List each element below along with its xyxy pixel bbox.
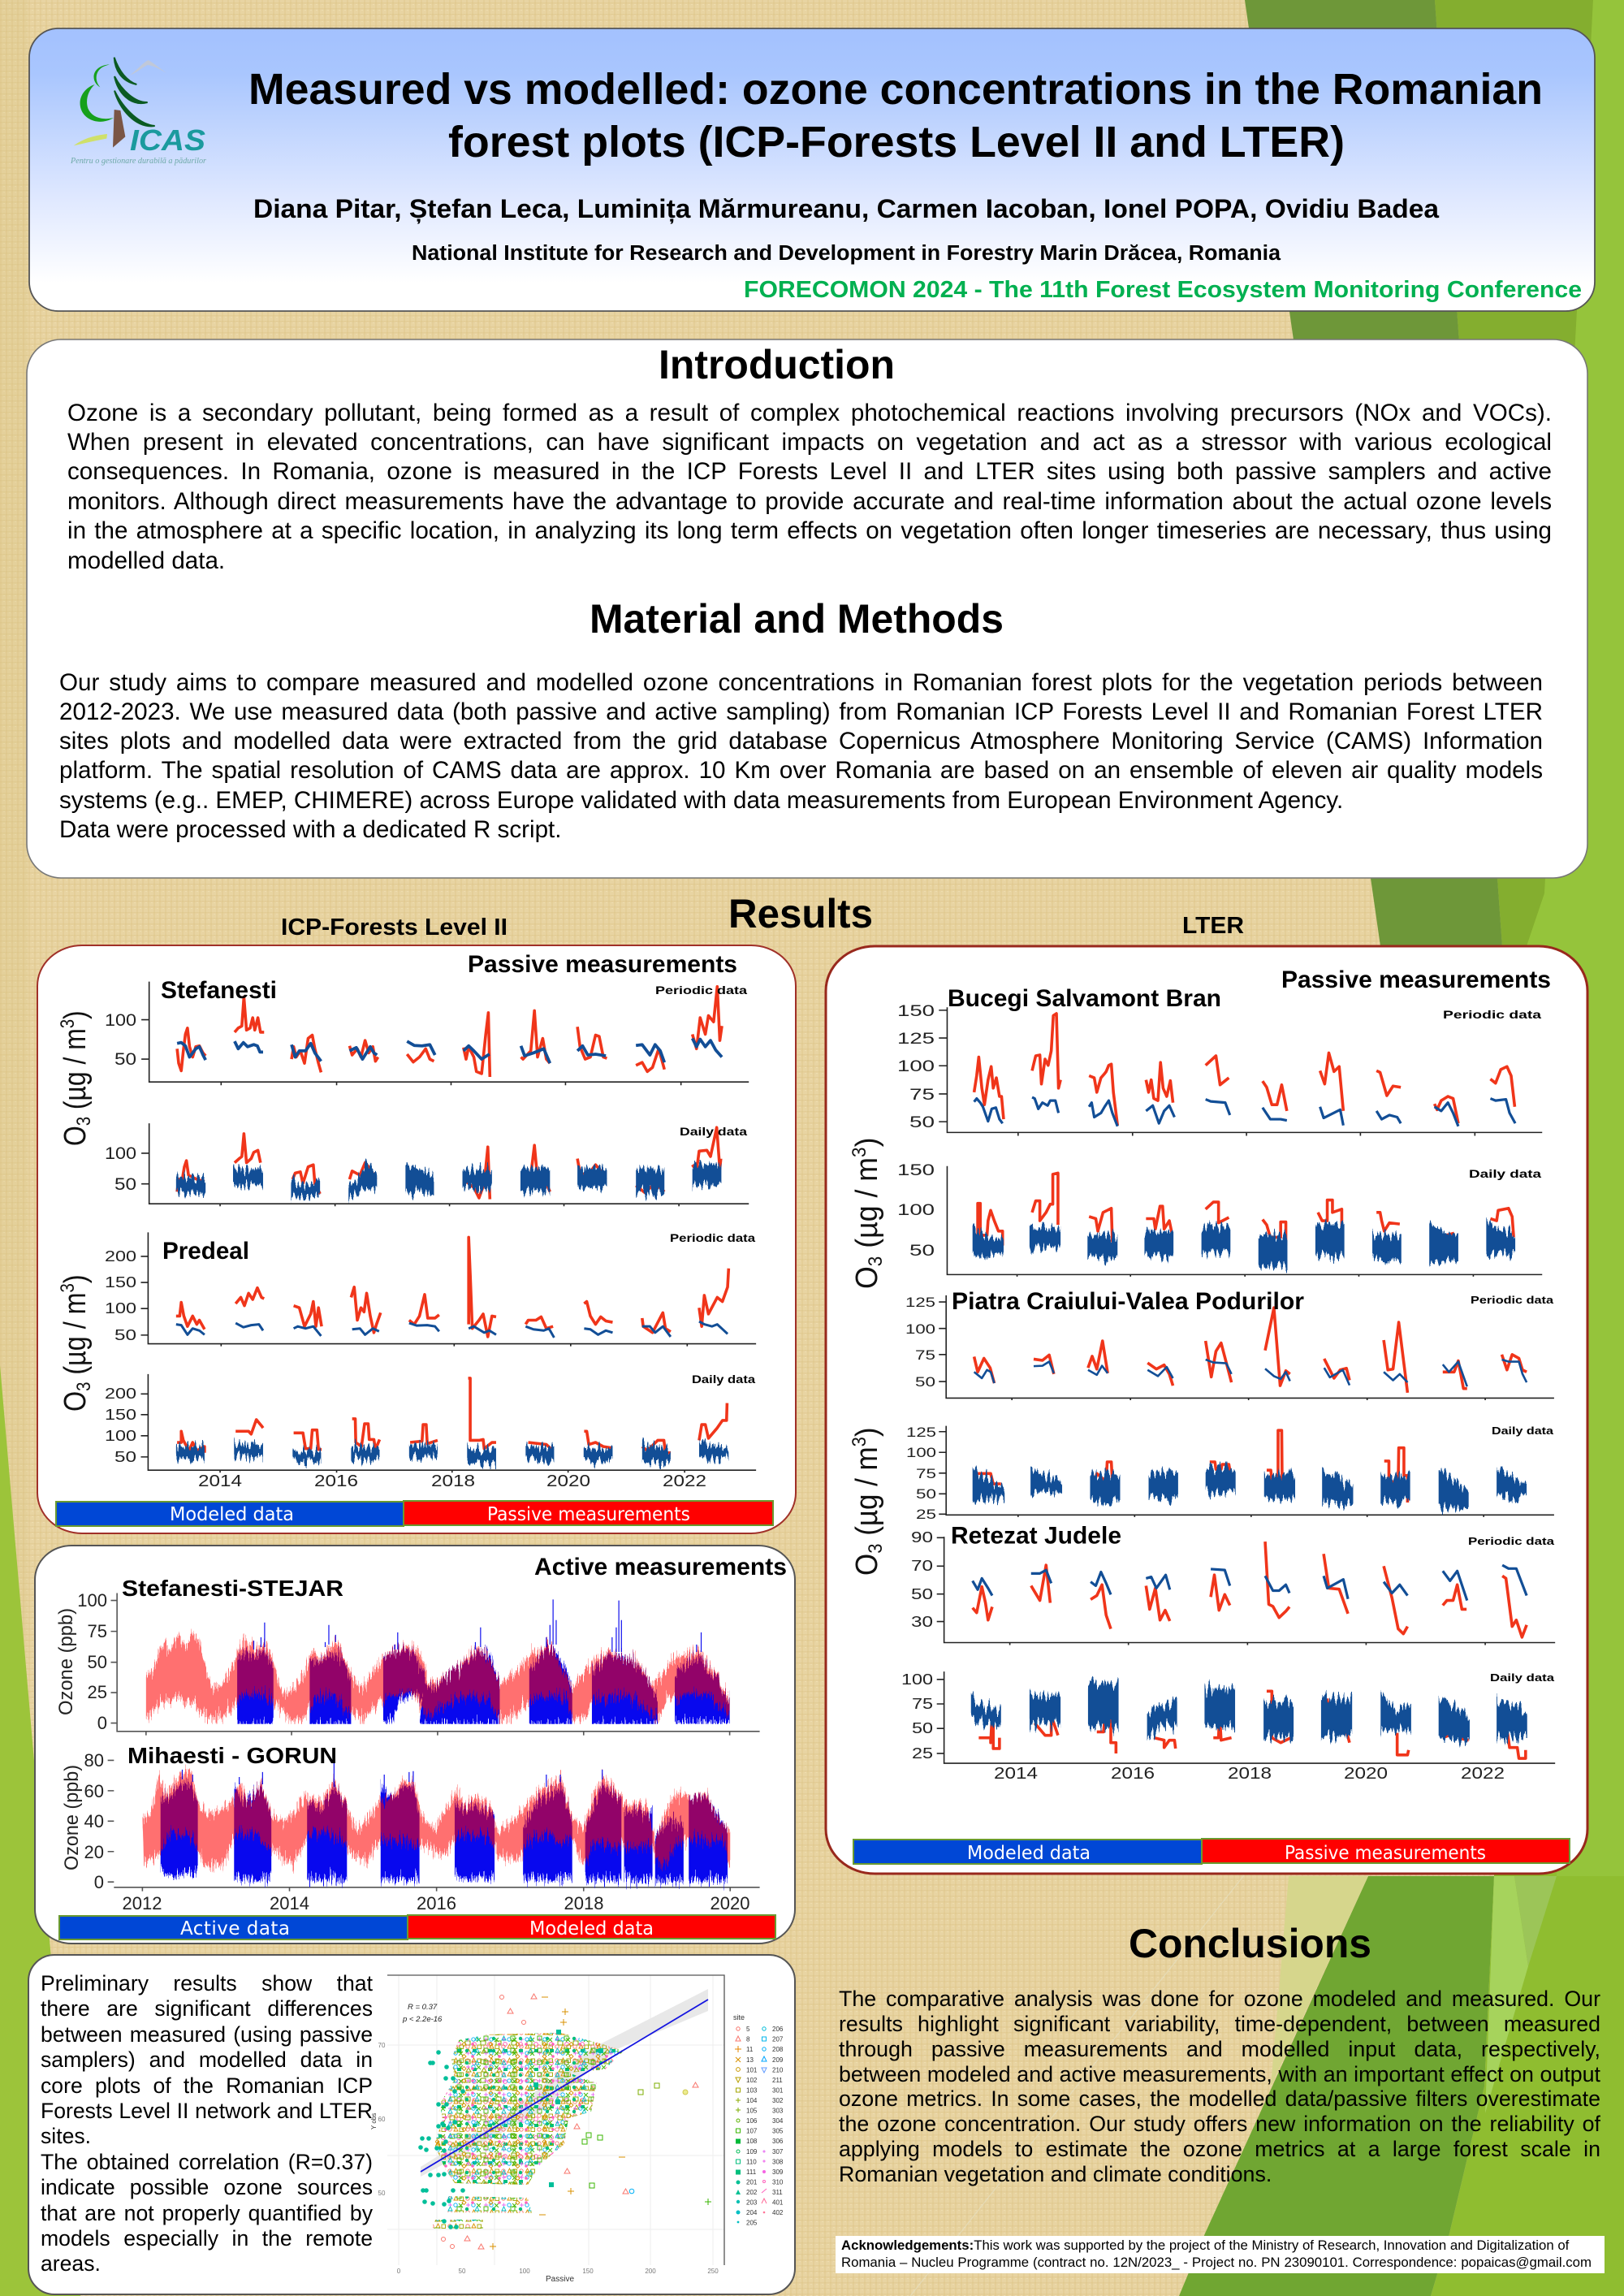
legend: site codes: 310 xyxy=(772,2178,784,2186)
chart: Stefanesti daily data: 50 xyxy=(114,1175,136,1194)
legend: site codes: 205 xyxy=(746,2219,758,2227)
chart: Stefanesti-STEJAR ozone time series: Stefanesti-STEJAR xyxy=(122,1576,343,1601)
chart: Predeal daily data: 50 xyxy=(114,1449,136,1465)
title: forest plots (ICP-Forests Level II and LTER) xyxy=(448,118,1345,166)
text block: introduction: in the atmosphere at a specific location, in analyzing its long term effects on vegetation often longer timeseries are necessary, thus using xyxy=(67,517,1552,544)
authors: Diana Pitar, Ștefan Leca, Luminița Mărmureanu, Carmen Iacoban, Ionel POPA, Ovidiu Badea xyxy=(253,194,1439,223)
chart: scatter plot of modelled vs passive ozone: 250 xyxy=(707,2268,719,2275)
legend: site codes: 308 xyxy=(772,2159,784,2165)
legend: site codes: 106 xyxy=(746,2117,758,2125)
legend: site codes: 211 xyxy=(772,2077,783,2084)
chart: Piatra Craiului daily data: 25 xyxy=(916,1507,936,1522)
chart: Predeal daily data: 2022 xyxy=(663,1472,706,1490)
text block: preliminary results xyxy=(41,1971,382,2284)
axis label: O3 Stefanesti: 3 xyxy=(72,1117,94,1126)
chart: Stefanesti periodic data: 50 xyxy=(114,1050,136,1069)
chart: Mihaesti-GORUN ozone time series: 20 xyxy=(84,1842,104,1862)
conference name: FORECOMON 2024 - The 11th Forest Ecosystem Monitoring Conference xyxy=(744,277,1582,303)
axis label: O3 Predeal: 3 xyxy=(56,1283,78,1292)
legend: site codes: 102 xyxy=(746,2077,758,2084)
legend: site codes: site xyxy=(733,2013,745,2021)
legend bar: modeled vs passive xyxy=(56,1501,773,1526)
chart: scatter plot of modelled vs passive ozone: 200 xyxy=(645,2268,656,2275)
chart: Bucegi daily data: 150 xyxy=(897,1162,935,1179)
icon: ICAS logo xyxy=(70,58,207,166)
axis label: O3 Predeal: O xyxy=(58,1391,93,1412)
chart: Bucegi periodic data: 100 xyxy=(897,1058,935,1075)
chart: Retezat Judele daily data: 50 xyxy=(912,1720,933,1736)
legend: site codes: 8 xyxy=(746,2035,750,2043)
axis label: O3 Bucegi: 3 xyxy=(864,1256,886,1266)
legend: site codes: 301 xyxy=(772,2087,784,2094)
chart: Stefanesti periodic data: Periodic data xyxy=(655,984,747,997)
chart: Retezat Judele daily data: Daily data xyxy=(1490,1671,1555,1684)
text block: conclusions: Romanian vegetation and climate conditions. xyxy=(839,2162,1272,2186)
panel heading: Passive measurements: Passive measurements xyxy=(1281,966,1551,993)
text block: preliminary results: areas. xyxy=(41,2251,101,2276)
legend: site codes: 207 xyxy=(772,2035,784,2043)
legend: site codes: 111 xyxy=(746,2168,757,2176)
chart: Piatra Craiului periodic data: 50 xyxy=(915,1374,935,1390)
chart: Piatra Craiului periodic data: Piatra Craiului-Valea Podurilor xyxy=(952,1288,1304,1315)
chart: Predeal daily data: 2018 xyxy=(431,1472,475,1490)
legend bar: active vs modeled: Modeled data xyxy=(529,1918,654,1939)
legend: site codes: 105 xyxy=(746,2107,758,2115)
axis label: O3 Predeal: 3 xyxy=(72,1382,94,1391)
chart: Bucegi periodic data: 125 xyxy=(897,1031,935,1048)
panel heading: Passive measurements: Passive measurements xyxy=(468,951,737,978)
chart: Predeal periodic data: 200 xyxy=(105,1248,136,1265)
text block: introduction xyxy=(67,398,1578,582)
chart: Mihaesti-GORUN ozone time series: Mihaesti - GORUN xyxy=(127,1743,337,1768)
chart: scatter plot of modelled vs passive ozone: 100 xyxy=(519,2268,530,2275)
chart: scatter plot of modelled vs passive ozone: R = 0.37 xyxy=(408,2003,438,2012)
chart: Retezat Judele periodic data: 50 xyxy=(911,1586,933,1602)
chart: Stefanesti-STEJAR ozone time series: 25 xyxy=(88,1682,107,1702)
legend: site codes: 302 xyxy=(772,2097,784,2104)
axis label: O3 Bucegi: (µg / m xyxy=(849,1157,883,1256)
chart: Stefanesti daily data: 100 xyxy=(105,1144,136,1163)
chart: Mihaesti-GORUN ozone time series: 60 xyxy=(84,1781,104,1801)
chart: Retezat Judele daily data: 100 xyxy=(901,1671,933,1688)
legend: site codes: 109 xyxy=(746,2148,758,2155)
chart: scatter plot of modelled vs passive ozone: 60 xyxy=(378,2116,386,2123)
axis label: O3 Stefanesti: 3 xyxy=(56,1019,78,1028)
acknowledgements box: Acknowledgements:This work was supported by the project of the Ministry of Research, Innovation and Digitalization of xyxy=(841,2238,1569,2253)
chart: Piatra Craiului daily data xyxy=(906,1425,1554,1522)
text block: conclusions: applying models to estimate the ozone metrics at a large forest scale in xyxy=(839,2137,1600,2161)
heading: ICP-Forests Level II: ICP-Forests Level II xyxy=(281,915,508,940)
axis label: O3 Piatra and Retezat: 3 xyxy=(864,1544,886,1554)
chart: Predeal periodic data: 50 xyxy=(114,1327,136,1343)
chart: Piatra Craiului daily data: 100 xyxy=(906,1445,936,1460)
chart: Retezat Judele daily data: 2014 xyxy=(994,1765,1038,1783)
chart: scatter plot of modelled vs passive ozone: Passive xyxy=(546,2275,574,2284)
axis label: O3 Stefanesti: (µg / m xyxy=(58,1028,93,1117)
title xyxy=(248,65,1543,166)
chart: Mihaesti-GORUN ozone time series: 2018 xyxy=(564,1893,603,1913)
legend: site codes: 304 xyxy=(772,2117,784,2125)
legend bar: active vs modeled xyxy=(59,1915,775,1939)
legend: site codes: 401 xyxy=(772,2199,784,2206)
chart: Retezat Judele daily data: 2022 xyxy=(1461,1765,1505,1783)
legend: site codes: 5 xyxy=(746,2026,750,2033)
panel: LTER passive measurements xyxy=(826,946,1587,1874)
text block: methods: Data were processed with a dedicated R script. xyxy=(59,816,561,843)
chart: Stefanesti daily data: Daily data xyxy=(680,1125,747,1138)
text block: methods: Our study aims to compare measured and modelled ozone concentrations in Romanian forest plots for the vegetation periods between xyxy=(59,669,1543,695)
chart: Mihaesti-GORUN ozone time series: 2012 xyxy=(123,1893,162,1913)
chart: Piatra Craiului daily data: 75 xyxy=(916,1466,936,1481)
text block: introduction: modelled data. xyxy=(67,547,225,574)
chart: Retezat Judele daily data: 75 xyxy=(912,1696,933,1712)
chart: Bucegi periodic data: 150 xyxy=(897,1003,935,1020)
chart: Stefanesti periodic data xyxy=(105,977,749,1085)
legend: site codes: 209 xyxy=(772,2056,784,2064)
chart: scatter plot of modelled vs passive ozone: 70 xyxy=(378,2042,386,2049)
panel: active measurements xyxy=(35,1546,795,1944)
chart: Retezat Judele periodic data: Periodic data xyxy=(1468,1535,1555,1547)
text block: methods: sites plots and modelled data were extracted from the grid database Copernicus Atmosphere Monitoring Service (CAMS) Information xyxy=(59,728,1543,755)
chart: Bucegi daily data: 50 xyxy=(909,1243,935,1260)
chart: Mihaesti-GORUN ozone time series: 2016 xyxy=(417,1893,456,1913)
chart: Bucegi periodic data: 75 xyxy=(909,1087,935,1104)
legend: site codes: 201 xyxy=(746,2178,758,2186)
chart: Retezat Judele periodic data: 90 xyxy=(911,1529,933,1546)
axis label: O3 Piatra and Retezat: (µg / m xyxy=(849,1446,883,1544)
chart: Bucegi daily data xyxy=(897,1162,1542,1277)
chart: Stefanesti-STEJAR ozone time series: Ozone (ppb) xyxy=(55,1608,77,1715)
chart: Predeal daily data xyxy=(105,1373,756,1490)
chart: Stefanesti-STEJAR ozone time series: 75 xyxy=(88,1621,107,1641)
heading: Results: Results xyxy=(728,891,873,936)
legend: site codes: 305 xyxy=(772,2128,784,2134)
chart: Predeal periodic data: 100 xyxy=(105,1300,136,1317)
text block: preliminary results: Forests Level II network and LTER xyxy=(41,2099,373,2123)
chart: Piatra Craiului daily data: Daily data xyxy=(1492,1425,1554,1437)
legend: site codes: 203 xyxy=(746,2199,758,2206)
chart: Predeal periodic data: Predeal xyxy=(162,1238,249,1265)
text block: conclusions: the ozone concentration. Our study offers new information on the reliability of xyxy=(839,2112,1600,2136)
chart: Mihaesti-GORUN ozone time series xyxy=(61,1743,760,1913)
chart: scatter plot of modelled vs passive ozone: p < 2.2e-16 xyxy=(402,2015,443,2024)
chart: Predeal periodic data: Periodic data xyxy=(670,1231,755,1244)
chart: Piatra Craiului periodic data: 100 xyxy=(905,1321,935,1337)
chart: Bucegi daily data: Daily data xyxy=(1469,1167,1541,1180)
chart: scatter plot of modelled vs passive ozone: 50 xyxy=(378,2190,386,2197)
chart: Stefanesti-STEJAR ozone time series: 0 xyxy=(97,1713,107,1733)
legend: site codes: 309 xyxy=(772,2168,784,2176)
chart: Piatra Craiului periodic data: Periodic data xyxy=(1471,1294,1554,1306)
axis label: O3 Bucegi: ) xyxy=(849,1137,883,1147)
axis label: O3 Predeal: (µg / m xyxy=(58,1292,93,1382)
chart: Retezat Judele daily data: 25 xyxy=(912,1745,933,1762)
legend: site codes: 311 xyxy=(772,2189,783,2196)
text block: introduction: Ozone is a secondary pollutant, being formed as a result of complex photochemical reactions involving precursors (NOx and VOCs). xyxy=(67,400,1552,426)
chart: Predeal daily data: 2016 xyxy=(314,1472,358,1490)
text block: conclusions: through passive measurements and modelled input data, respectively, xyxy=(839,2037,1600,2061)
text block: conclusions: results highlight significant variability, time-dependent, between measured xyxy=(839,2012,1600,2036)
heading: Introduction: Introduction xyxy=(659,342,895,387)
chart: Mihaesti-GORUN ozone time series: 0 xyxy=(94,1872,104,1892)
chart: Predeal daily data: 200 xyxy=(105,1386,136,1402)
legend: site codes: 303 xyxy=(772,2107,784,2115)
axis label: O3 Piatra and Retezat: 3 xyxy=(848,1437,870,1446)
affiliation: National Institute for Research and Development in Forestry Marin Drăcea, Romania xyxy=(412,242,1281,265)
chart: Bucegi periodic data: 50 xyxy=(909,1114,935,1131)
text block: preliminary results: there are significant differences xyxy=(41,1996,373,2021)
text block: preliminary results: that are not properly quantified by xyxy=(41,2201,373,2225)
legend bar: modeled vs passive: Passive measurements xyxy=(487,1504,690,1525)
icon: ICAS logo: Pentru o gestionare durabilă a pădurilor xyxy=(70,156,207,166)
chart: Bucegi daily data: 100 xyxy=(897,1202,935,1219)
chart: Predeal daily data: 150 xyxy=(105,1407,136,1423)
chart: Retezat Judele periodic data: 30 xyxy=(911,1614,933,1630)
chart: Mihaesti-GORUN ozone time series: 40 xyxy=(84,1811,104,1831)
chart: Retezat Judele periodic data: Retezat Judele xyxy=(951,1522,1121,1550)
chart: Bucegi periodic data: Bucegi Salvamont Bran xyxy=(948,985,1221,1012)
axis label: O3 Bucegi: O xyxy=(849,1266,883,1289)
text block: methods: 2012-2023. We use measured data (both passive and active sampling) from Romanian ICP Forests Level II and Romanian Forest LTER xyxy=(59,698,1543,725)
panel: header xyxy=(29,28,1595,311)
chart: Piatra Craiului daily data: 50 xyxy=(916,1486,936,1502)
chart: Retezat Judele daily data: 2018 xyxy=(1228,1765,1272,1783)
text block: preliminary results: between measured (using passive xyxy=(41,2022,373,2047)
chart: Stefanesti periodic data: Stefanesti xyxy=(161,977,277,1004)
axis label: O3 Stefanesti: ) xyxy=(58,1010,93,1019)
legend: site codes: 108 xyxy=(746,2138,758,2145)
chart: Mihaesti-GORUN ozone time series: 2014 xyxy=(270,1893,309,1913)
heading: Conclusions: Conclusions xyxy=(1129,1921,1371,1966)
text block: introduction: monitors. Although direct measurements have the advantage to provide accurate and real-time information about the actual ozone levels xyxy=(67,488,1552,515)
axis label: O3 Piatra and Retezat: ) xyxy=(849,1427,883,1437)
text block: preliminary results: The obtained correlation (R=0.37) xyxy=(41,2150,373,2174)
text block: conclusions: ozone metrics. In some cases, the modelled data/passive filters overestimate xyxy=(839,2086,1600,2111)
chart: Predeal daily data: 2014 xyxy=(198,1472,242,1490)
axis label: O3 Piatra and Retezat: O xyxy=(849,1554,883,1576)
legend: site codes: 13 xyxy=(746,2056,754,2064)
text block: methods xyxy=(59,668,1570,851)
panel heading: Active measurements: Active measurements xyxy=(534,1554,787,1580)
legend: site codes: 206 xyxy=(772,2026,784,2033)
legend bar: active vs modeled: Active data xyxy=(180,1918,290,1939)
chart: Stefanesti-STEJAR ozone time series: 100 xyxy=(77,1590,107,1611)
text block: introduction: When present in elevated concentrations, can have significant impacts on vegetation and act as a stressor with various ecological xyxy=(67,429,1552,456)
text block: preliminary results: models especially in the remote xyxy=(41,2226,373,2251)
chart: Predeal periodic data: 150 xyxy=(105,1274,136,1291)
chart: Mihaesti-GORUN ozone time series: 80 xyxy=(84,1750,104,1771)
text block: preliminary results: sites. xyxy=(41,2124,91,2148)
chart: Piatra Craiului periodic data xyxy=(905,1288,1554,1400)
panel: preliminary results and scatter plot xyxy=(28,1955,795,2294)
text block: methods: platform. The spatial resolution of CAMS data are approx. 10 Km over Romania are based on an ensemble of eleven air quality models xyxy=(59,757,1543,784)
legend: site codes: 110 xyxy=(746,2159,757,2165)
chart: Retezat Judele daily data: 2020 xyxy=(1344,1765,1388,1783)
chart: scatter plot of modelled vs passive ozone: 50 xyxy=(459,2268,466,2275)
chart: Piatra Craiului periodic data: 75 xyxy=(915,1347,935,1363)
chart: Bucegi periodic data xyxy=(897,985,1542,1135)
legend: site codes: 202 xyxy=(746,2189,758,2196)
chart: Mihaesti-GORUN ozone time series: 2020 xyxy=(710,1893,749,1913)
chart: Retezat Judele daily data xyxy=(901,1671,1555,1783)
legend: site codes: 306 xyxy=(772,2138,784,2145)
chart: scatter plot of modelled vs passive ozone: 0 xyxy=(397,2268,401,2275)
acknowledgements box: Romania – Nucleu Programme (contract no. 12N/2023_ - Project no. PN 23090101. Correspondence: popaicas@gmail.com xyxy=(841,2255,1592,2270)
legend: site codes: 307 xyxy=(772,2148,784,2155)
text block: introduction: consequences. In Romania, ozone is measured in the ICP Forests Level II and LTER sites using both passive samplers and active xyxy=(67,458,1552,485)
axis label: O3 Stefanesti: O xyxy=(58,1126,93,1146)
legend: site codes: 11 xyxy=(746,2046,754,2053)
heading: LTER: LTER xyxy=(1182,913,1244,939)
chart: Stefanesti periodic data: 100 xyxy=(105,1011,136,1030)
chart: Retezat Judele periodic data xyxy=(911,1522,1555,1645)
chart: Predeal periodic data xyxy=(105,1231,756,1347)
chart: Predeal daily data: 2020 xyxy=(546,1472,590,1490)
text block: methods: systems (e.g.. EMEP, CHIMERE) across Europe validated with data measurements from European Environment Agency. xyxy=(59,787,1343,814)
heading: Material and Methods: Material and Methods xyxy=(590,596,1004,642)
text block: preliminary results: Preliminary results show that xyxy=(41,1971,373,1995)
chart: Retezat Judele periodic data: 70 xyxy=(911,1558,933,1574)
legend: site codes: 210 xyxy=(772,2066,784,2074)
chart: scatter plot of modelled vs passive ozone: Y obs xyxy=(370,2113,378,2130)
chart: scatter plot of modelled vs passive ozone: 150 xyxy=(582,2268,594,2275)
chart: Stefanesti-STEJAR ozone time series: 50 xyxy=(88,1652,107,1672)
legend: site codes xyxy=(733,2013,784,2227)
legend bar: modeled vs passive: Passive measurements xyxy=(1285,1843,1486,1864)
legend: site codes: 101 xyxy=(746,2066,758,2074)
legend bar: modeled vs passive xyxy=(853,1839,1570,1864)
chart: Piatra Craiului daily data: 125 xyxy=(906,1425,936,1440)
legend: site codes: 104 xyxy=(746,2097,758,2104)
text block: preliminary results: core plots of the Romanian ICP xyxy=(41,2073,373,2098)
panel: introduction and methods xyxy=(27,339,1587,878)
chart: Stefanesti-STEJAR ozone time series xyxy=(55,1576,760,1736)
text block: conclusions: The comparative analysis was done for ozone modeled and measured. Our xyxy=(839,1987,1600,2011)
legend: site codes: 208 xyxy=(772,2046,784,2053)
chart: Predeal daily data: 100 xyxy=(105,1428,136,1444)
acknowledgements box xyxy=(836,2236,1605,2273)
legend: site codes: 103 xyxy=(746,2087,758,2094)
chart: Predeal daily data: Daily data xyxy=(692,1373,755,1386)
legend: site codes: 402 xyxy=(772,2209,784,2216)
legend bar: modeled vs passive: Modeled data xyxy=(170,1504,294,1525)
chart: Mihaesti-GORUN ozone time series: Ozone (ppb) xyxy=(61,1765,83,1870)
chart: Bucegi periodic data: Periodic data xyxy=(1443,1008,1541,1021)
panel: ICP-Forests passive measurements xyxy=(37,945,796,1533)
text block: preliminary results: indicate possible ozone sources xyxy=(41,2175,373,2199)
legend bar: modeled vs passive: Modeled data xyxy=(967,1843,1091,1864)
chart: Retezat Judele daily data: 2016 xyxy=(1111,1765,1155,1783)
axis label: O3 Bucegi: 3 xyxy=(848,1147,870,1157)
text block: conclusions: between modeled and active measurements, with an important effect on output xyxy=(839,2062,1600,2086)
legend: site codes: 204 xyxy=(746,2209,758,2216)
title: Measured vs modelled: ozone concentrations in the Romanian xyxy=(248,65,1543,114)
chart: Stefanesti daily data xyxy=(105,1123,749,1206)
icon: ICAS logo: ICAS xyxy=(130,123,205,157)
chart: Piatra Craiului periodic data: 125 xyxy=(905,1295,935,1310)
text block: preliminary results: samplers) and modelled data in xyxy=(41,2047,373,2072)
legend: site codes: 107 xyxy=(746,2128,758,2134)
text block: conclusions xyxy=(839,1987,1610,2194)
chart: scatter plot of modelled vs passive ozone xyxy=(370,1975,784,2284)
axis label: O3 Predeal: ) xyxy=(58,1274,93,1283)
